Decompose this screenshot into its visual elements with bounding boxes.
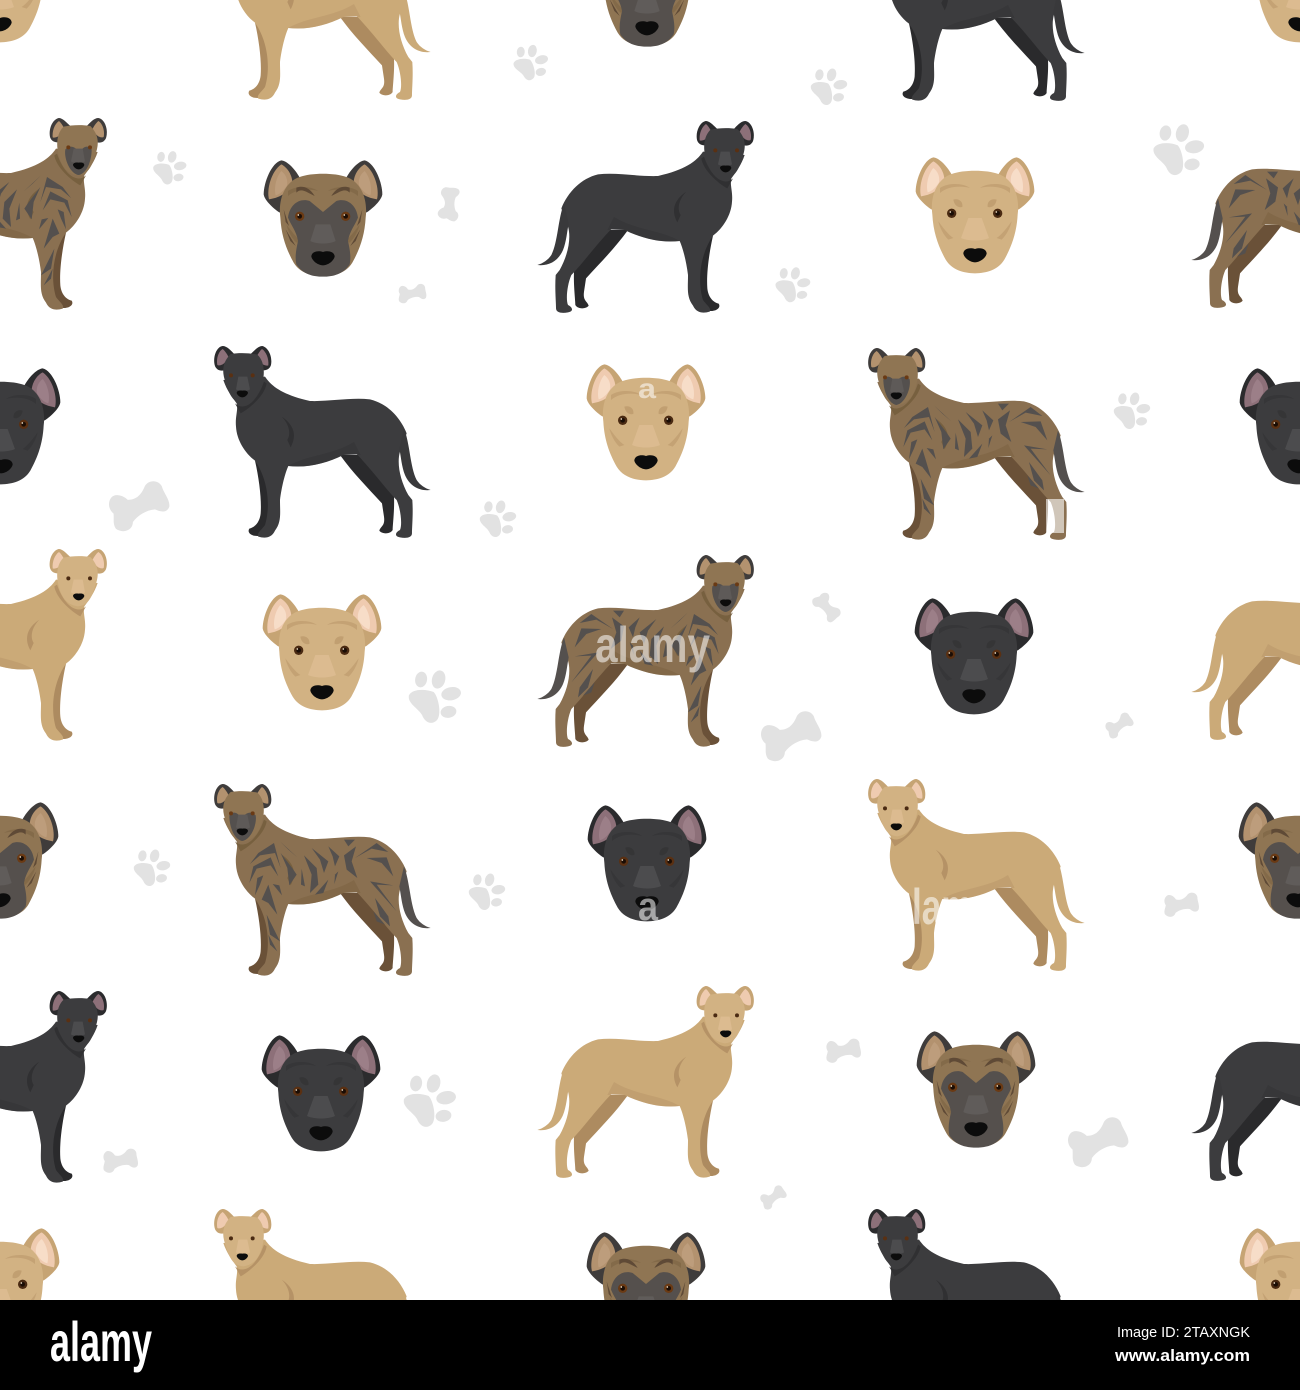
dog: black standing right bbox=[537, 121, 754, 313]
face: tan upper right bbox=[916, 157, 1034, 273]
dog: tan right edge bbox=[1191, 548, 1300, 740]
dog: tan left edge bbox=[0, 549, 107, 741]
dog: brindle left edge bbox=[0, 118, 107, 310]
dog: black bottom bbox=[868, 1209, 1085, 1390]
face: black lower center bbox=[588, 805, 706, 921]
footer logo: alamy: alamy bbox=[50, 1310, 152, 1373]
dog: black left edge bbox=[0, 991, 107, 1183]
dog: black right edge bbox=[1191, 989, 1300, 1181]
footer bar bbox=[0, 1300, 1300, 1390]
face: brindle upper bbox=[264, 160, 382, 277]
dog: black standing left bbox=[214, 346, 431, 538]
dog: black top bbox=[868, 0, 1085, 101]
dog: tan bottom bbox=[214, 1209, 431, 1390]
dog: brindle lower left bbox=[214, 784, 431, 976]
face: brindle left edge bbox=[0, 802, 58, 919]
face: brindle lower right bbox=[917, 1031, 1035, 1148]
dog: tan lower right bbox=[868, 779, 1085, 971]
paw prints and bones bbox=[100, 43, 1205, 1211]
face: tan bottom left bbox=[0, 1228, 59, 1344]
dog: brindle right edge bbox=[1191, 116, 1300, 308]
face: black right edge bbox=[1240, 368, 1300, 484]
dog: tan center bbox=[537, 986, 754, 1178]
face: tan top right bbox=[1241, 0, 1300, 42]
face: black left edge bbox=[0, 368, 60, 484]
watermark fragments: a bbox=[638, 885, 659, 929]
face: tan center bbox=[587, 364, 705, 480]
dog: brindle standing left bbox=[868, 348, 1085, 540]
footer image id: Image ID: 2TAXNGK bbox=[1117, 1324, 1250, 1341]
dog: brindle center bbox=[537, 555, 754, 747]
face: tan top left bbox=[0, 0, 59, 42]
dog: tan top bbox=[214, 0, 431, 100]
face: tan bottom right bbox=[1240, 1228, 1300, 1344]
face: brindle top bbox=[588, 0, 706, 47]
watermark fragments: lamy bbox=[912, 879, 992, 935]
watermark fragments: alamy bbox=[595, 617, 710, 673]
watermark fragments: a bbox=[638, 373, 656, 404]
face: brindle bottom bbox=[587, 1232, 705, 1349]
face: tan middle bbox=[263, 594, 381, 710]
face: black middle bbox=[915, 598, 1033, 714]
watermark fragments bbox=[595, 373, 1064, 935]
face: brindle right edge bbox=[1239, 802, 1300, 919]
footer website: www.alamy.com bbox=[1114, 1346, 1250, 1365]
face: black lower left bbox=[262, 1035, 380, 1151]
